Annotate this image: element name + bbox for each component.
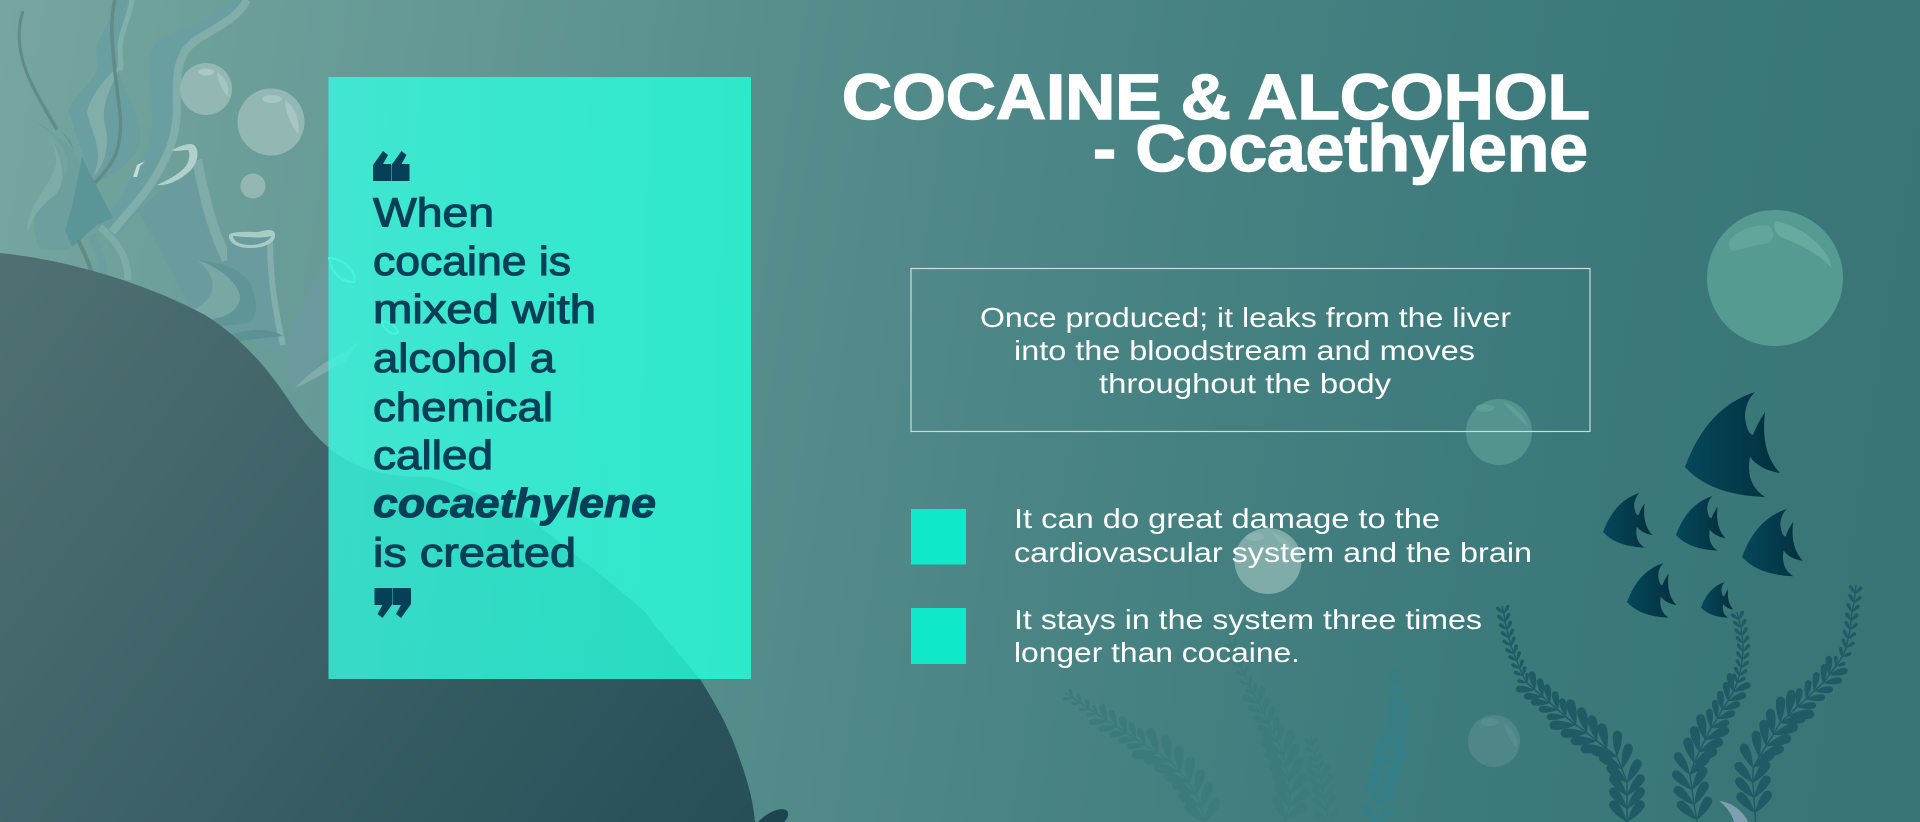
title: - Cocaethylene [1093,111,1588,185]
callout box: throughout the body [1099,368,1391,399]
teal fern [1374,668,1399,822]
faint ferns: bottom centre [1065,640,1331,822]
quote text block: called [373,432,493,478]
quote text block: When [373,190,494,236]
icon: opening quote mark [373,151,410,181]
bullet one [911,503,1532,568]
bubble: behind body text [1466,399,1532,465]
bullet two: longer than cocaine. [1014,637,1300,668]
callout box: Once produced; it leaks from the liver [980,302,1511,333]
coral rings [133,144,398,334]
hill [0,253,755,822]
dark ferns: bottom right [1502,585,1856,822]
quote text block: cocaethylene [373,480,656,526]
title: COCAINE & ALCOHOL [842,61,1590,133]
icon: closing quote mark [374,588,411,618]
bullet one: It can do great damage to the [1014,503,1440,534]
fish school [1603,392,1803,618]
quote card [328,77,751,679]
quote text block: is created [373,530,576,576]
bubble: over bullet text [1234,528,1302,594]
large bubble [1707,210,1843,346]
bubble: lower [1468,715,1520,767]
fish fin at hill base [758,809,788,822]
callout box [911,268,1590,432]
bullet one: cardiovascular system and the brain [1014,537,1532,568]
callout box: into the bloodstream and moves [1014,335,1475,366]
bullet two: It stays in the system three times [1014,604,1482,635]
quote text block: mixed with [373,286,596,332]
seaweed and coral: top left [19,0,360,393]
quote text block: chemical [373,384,553,430]
quote text block: alcohol a [373,335,555,381]
quote text block: cocaine is [373,238,571,284]
bullet two [911,604,1482,668]
seaweed tip: bottom right [1719,801,1748,822]
title [842,61,1590,185]
quote text block [373,151,656,618]
bubbles: top left [180,63,304,198]
